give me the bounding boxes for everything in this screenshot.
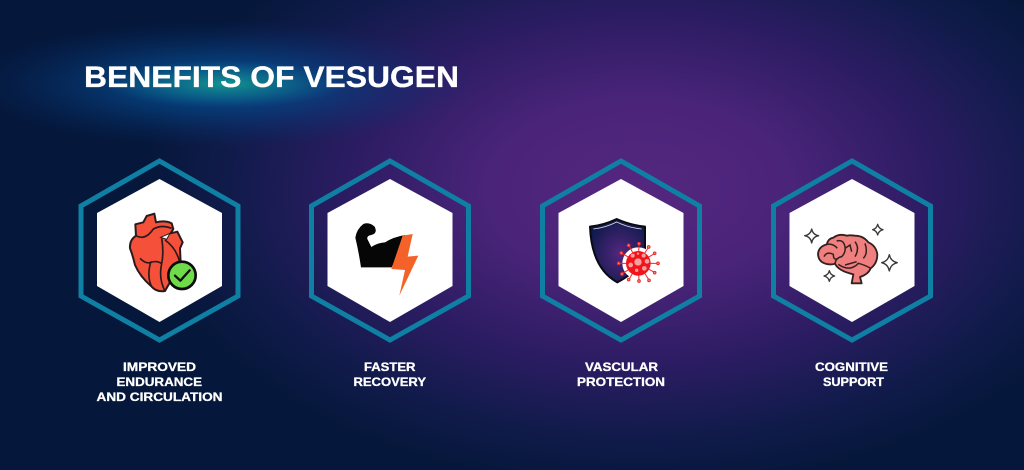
- label: [96, 360, 223, 404]
- label: AND CIRCULATION: [96, 390, 223, 404]
- virus: [617, 242, 659, 282]
- panel: faster recovery: [312, 161, 468, 389]
- hexagon frame: [774, 161, 930, 340]
- white hexagon: [558, 179, 684, 322]
- label: FASTER: [364, 360, 416, 374]
- label: PROTECTION: [577, 375, 665, 389]
- hexagon frame: [81, 161, 238, 340]
- white hexagon: [97, 179, 222, 322]
- label: ENDURANCE: [116, 375, 202, 389]
- label: [577, 360, 665, 389]
- white hexagon: [790, 179, 914, 322]
- label: VASCULAR: [585, 360, 658, 374]
- white hexagon: [328, 179, 452, 322]
- icon: brain with sparkles: [805, 224, 897, 283]
- icon: heart with check mark: [130, 214, 196, 291]
- panel: cognitive support: [774, 161, 930, 389]
- icon: flexed arm and lightning bolt: [355, 223, 418, 296]
- icon: shield and virus: [590, 219, 659, 282]
- label: SUPPORT: [823, 375, 884, 389]
- label: [354, 360, 427, 389]
- panel: vascular protection: [542, 161, 700, 389]
- label: RECOVERY: [354, 375, 427, 389]
- hexagon frame: [312, 161, 468, 340]
- sparkles: [805, 224, 897, 281]
- label: IMPROVED: [123, 360, 196, 374]
- title: BENEFITS OF VESUGEN: [84, 61, 459, 94]
- label: [815, 360, 888, 389]
- hexagon frame: [542, 161, 700, 340]
- label: COGNITIVE: [815, 360, 888, 374]
- panel: improved endurance and circulation: [81, 161, 238, 404]
